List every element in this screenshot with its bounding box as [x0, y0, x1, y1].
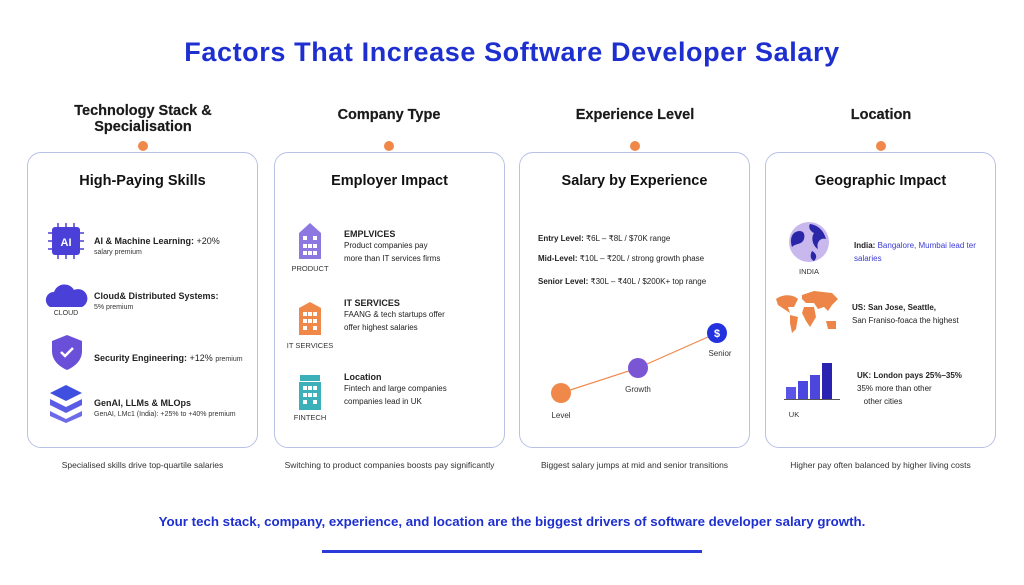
icon: AI chip: AI — [60, 237, 72, 249]
text: genai: GenAI, LLMs & MLOps — [94, 398, 191, 408]
chart: growth line: Level — [551, 411, 571, 420]
text: levels — [538, 234, 706, 286]
text: fintech: companies lead in UK — [344, 397, 422, 406]
icon: layers — [50, 385, 82, 423]
icon: AI chip — [48, 223, 84, 259]
text: product: more than IT services firms — [344, 254, 440, 263]
text: genai: GenAI, LMc1 (India): +25% to +40% premium — [94, 411, 236, 418]
icon: shield — [52, 335, 82, 370]
text: genai — [94, 398, 236, 418]
panel: experience — [519, 152, 750, 448]
footer statement: Your tech stack, company, experience, and location are the biggest drivers of software developer salary growth. — [159, 514, 865, 529]
icon: cloud — [46, 284, 88, 317]
text: fintech: Location — [344, 372, 382, 382]
icon: fintech building — [299, 375, 321, 410]
text: product — [344, 229, 440, 263]
title: Factors That Increase Software Developer Salary — [184, 37, 840, 67]
panel: geography: UK — [789, 410, 799, 419]
icon: cloud: CLOUD — [54, 310, 78, 317]
heading: experience: Experience Level — [576, 107, 694, 123]
text: US: San Franiso-foaca the highest — [852, 316, 959, 325]
caption 2: Switching to product companies boosts pay significantly — [285, 460, 494, 470]
chart: growth line — [551, 323, 732, 420]
caption 1: Specialised skills drive top-quartile salaries — [62, 460, 223, 470]
panel: employer: FINTECH — [294, 413, 326, 422]
caption 3: Biggest salary jumps at mid and senior transitions — [541, 460, 728, 470]
panel: skills: High-Paying Skills — [79, 173, 206, 189]
text: cloud: Cloud& Distributed Systems: — [94, 291, 219, 301]
text: cloud: 5% premium — [94, 304, 133, 311]
icon: globe — [789, 222, 829, 262]
panel: skills — [27, 152, 258, 448]
text: UK — [857, 371, 962, 406]
text: IT services: IT SERVICES — [344, 298, 400, 308]
heading inside: Geographic Impact — [815, 173, 946, 189]
heading: tech stack: Specialisation — [94, 119, 192, 135]
text: cloud — [94, 291, 219, 311]
text: levels: Senior Level: ₹30L – ₹40L / $200K+ top range — [538, 277, 706, 286]
text: levels: Entry Level: ₹6L – ₹8L / $70K range — [538, 234, 670, 243]
panel: employer: IT SERVICES — [287, 341, 333, 350]
text: US — [852, 303, 959, 325]
panel: employer — [274, 152, 505, 448]
panel: employer: Employer Impact — [331, 173, 448, 189]
text: India: India: Bangalore, Mumbai lead ter salaries — [854, 241, 976, 263]
text: product: EMPLVICES — [344, 229, 395, 239]
text: fintech — [344, 372, 447, 406]
text: IT services — [344, 298, 445, 332]
panel: geography: INDIA — [799, 267, 819, 276]
text: fintech: Fintech and large companies — [344, 384, 447, 393]
panel: employer: PRODUCT — [291, 264, 329, 273]
text: AI: AI & Machine Learning: +20% — [94, 236, 220, 246]
caption 4: Higher pay often balanced by higher living costs — [790, 460, 971, 470]
icon: world map — [776, 291, 838, 333]
heading: tech stack — [74, 103, 212, 135]
text: product: Product companies pay — [344, 241, 428, 250]
heading: location: Location — [851, 107, 911, 123]
text: UK: 35% more than other — [857, 384, 932, 393]
heading: tech stack: Technology Stack & — [74, 103, 212, 119]
heading: company type: Company Type — [338, 107, 440, 123]
panel: geography — [765, 152, 996, 448]
icon: bar chart — [784, 363, 840, 400]
text: UK: UK: London pays 25%–35% — [857, 371, 962, 380]
text: US: US: San Jose, Seattle, — [852, 303, 936, 312]
text: security: Security Engineering: +12% premium — [94, 353, 243, 363]
text: IT services: offer highest salaries — [344, 323, 418, 332]
icon: IT services building — [299, 302, 321, 335]
text: AI: salary premium — [94, 249, 142, 256]
text: AI — [94, 236, 220, 256]
icon: product building — [299, 223, 321, 259]
text: UK: other cities — [864, 397, 902, 406]
chart: growth line: Growth — [625, 385, 651, 394]
chart: growth line: $ — [714, 328, 720, 340]
chart: growth line: Senior — [708, 349, 732, 358]
panel: experience: Salary by Experience — [562, 173, 707, 189]
text: IT services: FAANG & tech startups offer — [344, 310, 445, 319]
text: levels: Mid-Level: ₹10L – ₹20L / strong growth phase — [538, 254, 704, 263]
